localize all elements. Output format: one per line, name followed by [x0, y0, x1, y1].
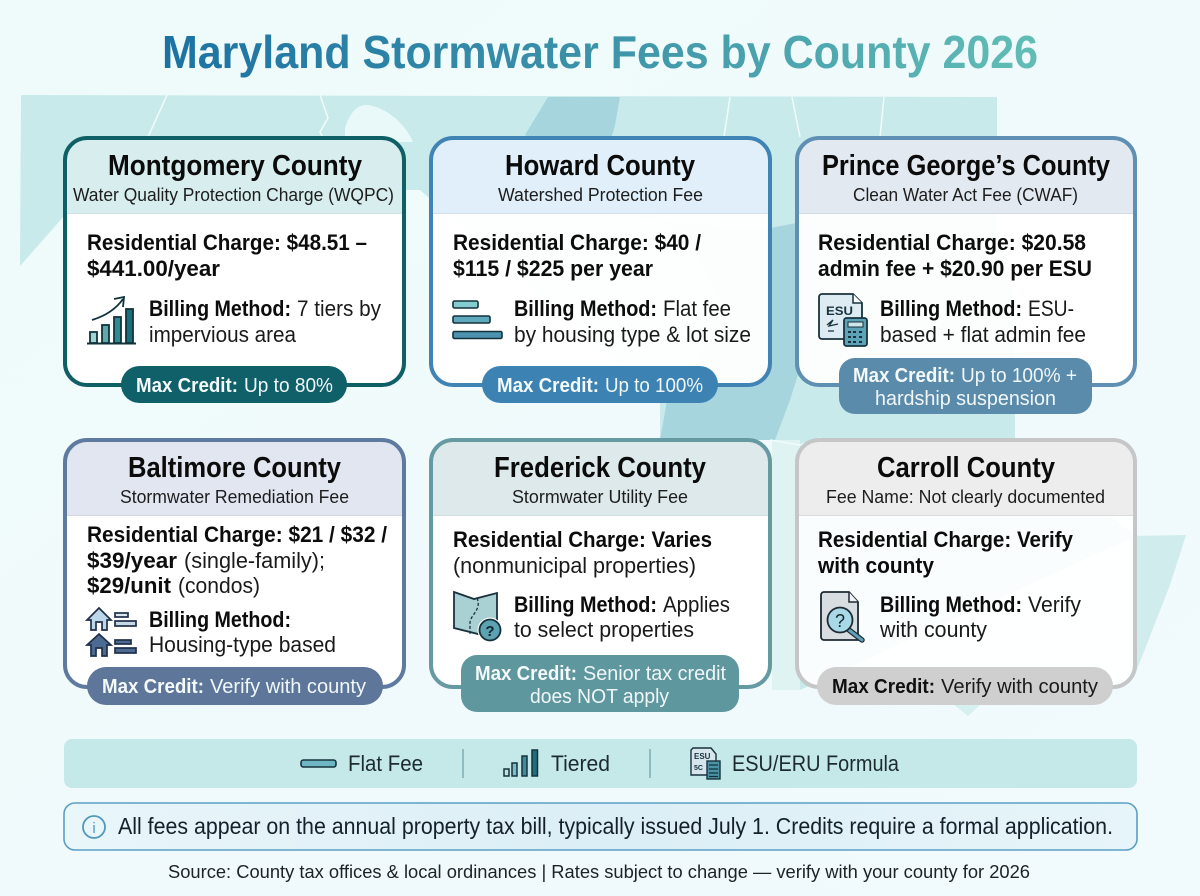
residential charge [87, 522, 387, 598]
max credit badge: Verify with county [210, 675, 367, 698]
residential charge: $39/year [87, 548, 177, 573]
billing method: Billing Method: [514, 592, 657, 617]
residential charge [453, 527, 712, 578]
billing method: Billing Method: [880, 592, 1022, 617]
icon: map with question mark [454, 592, 502, 642]
residential charge: (nonmunicipal properties) [453, 553, 696, 578]
billing method: to select properties [514, 617, 694, 642]
max credit badge: Max Credit: [853, 364, 955, 387]
billing method: Applies [663, 592, 730, 617]
icon: flat fee [301, 760, 336, 767]
max credit badge [87, 667, 383, 705]
max credit badge: Max Credit: [832, 675, 935, 698]
icon: flat fee bars [453, 301, 502, 338]
max credit badge: Up to 100% + [961, 364, 1077, 387]
billing method [149, 607, 336, 657]
max credit badge: Max Credit: [136, 374, 238, 397]
heading: Prince George's County: Prince George’s County [822, 150, 1110, 182]
max credit badge: Up to 80% [244, 374, 333, 397]
residential charge: Residential Charge: $20.58 [818, 230, 1086, 255]
max credit badge: Max Credit: [102, 675, 204, 698]
heading: Carroll County: Carroll County [877, 452, 1055, 484]
max credit badge [461, 655, 739, 712]
icon: info: i [92, 820, 96, 837]
legend [64, 739, 1137, 788]
residential charge: Residential Charge: $48.51 – [87, 230, 367, 255]
icon: document with magnifier [821, 592, 862, 640]
heading: Montgomery County: Montgomery County [108, 150, 362, 182]
fee name: Clean Water Act Fee (CWAF) [853, 184, 1078, 205]
residential charge: admin fee + $20.90 per ESU [818, 256, 1092, 281]
residential charge [817, 527, 1074, 578]
billing method [880, 296, 1086, 347]
max credit badge: does NOT apply [530, 685, 670, 708]
label: flat fee: Flat Fee [348, 751, 423, 776]
billing method: Flat fee [663, 296, 731, 321]
max credit badge [839, 358, 1092, 414]
max credit badge: Max Credit: [475, 662, 577, 685]
icon: document with magnifier: ? [835, 611, 845, 631]
fee name: Watershed Protection Fee [498, 184, 703, 205]
icon: ESU document and calculator [819, 294, 867, 346]
billing method: Billing Method: [149, 607, 291, 632]
residential charge: $115 / $225 per year [453, 256, 653, 281]
residential charge: $29/unit [87, 573, 172, 598]
icon: houses and bars [87, 608, 136, 656]
residential charge: Residential Charge: Varies [453, 527, 712, 552]
fee name: Stormwater Remediation Fee [120, 486, 349, 507]
panel: Howard County [431, 138, 770, 403]
icon: info [83, 816, 105, 838]
billing method: 7 tiers by [297, 296, 381, 321]
max credit badge: Verify with county [941, 675, 1099, 698]
icon: tiered [504, 750, 538, 776]
billing method: impervious area [149, 322, 297, 347]
panel: Montgomery County [65, 138, 404, 403]
billing method [879, 592, 1081, 642]
label: tiered: Tiered [551, 751, 610, 776]
billing method [514, 296, 751, 347]
panel: Frederick County [431, 440, 770, 712]
billing method: by housing type & lot size [514, 322, 751, 347]
max credit badge: Up to 100% [605, 374, 703, 397]
residential charge: Residential Charge: Verify [818, 527, 1074, 552]
residential charge: (single-family); [184, 548, 325, 573]
fee name: Stormwater Utility Fee [512, 486, 688, 507]
billing method: Billing Method: [149, 296, 291, 321]
title: Maryland Stormwater Fees by County 2026 [162, 26, 1038, 78]
residential charge: with county [817, 553, 935, 578]
billing method: with county [879, 617, 987, 642]
residential charge [87, 230, 367, 281]
residential charge: Residential Charge: $40 / [453, 230, 701, 255]
residential charge [453, 230, 701, 281]
residential charge [818, 230, 1092, 281]
heading: Frederick County: Frederick County [494, 452, 706, 484]
max credit badge: hardship suspension [875, 387, 1056, 410]
heading: Howard County: Howard County [505, 150, 695, 182]
icon: ESU formula: ESU [694, 752, 711, 761]
icon: ESU document and calculator: ESU [826, 304, 853, 318]
note text: All fees appear on the annual property tax bill, typically issued July 1. Credits require a formal application. [118, 813, 1113, 839]
icon: rising bar chart [87, 297, 136, 344]
label: ESU/ERU formula: ESU/ERU Formula [732, 751, 900, 776]
billing method: Housing-type based [149, 632, 336, 657]
source line: Source: County tax offices & local ordinances | Rates subject to change — verify with your county for 2026 [168, 862, 1030, 882]
billing method: Verify [1028, 592, 1081, 617]
billing method [514, 592, 730, 642]
residential charge: $441.00/year [87, 256, 220, 281]
billing method: ESU- [1028, 296, 1074, 321]
icon: map with question mark: ? [485, 623, 495, 640]
panel: Prince George's County [797, 138, 1135, 414]
fee name: Fee Name: Not clearly documented [826, 486, 1105, 507]
max credit badge: Senior tax credit [583, 662, 726, 685]
max credit badge [482, 366, 718, 403]
residential charge: (condos) [178, 573, 260, 598]
icon: ESU formula [691, 748, 720, 779]
max credit badge [817, 667, 1113, 705]
fee name: Water Quality Protection Charge (WQPC) [73, 184, 394, 205]
info note [64, 803, 1137, 850]
billing method: Billing Method: [514, 296, 657, 321]
billing method: Billing Method: [880, 296, 1022, 321]
heading: Baltimore County: Baltimore County [128, 452, 341, 484]
max credit badge [121, 366, 347, 403]
max credit badge: Max Credit: [497, 374, 599, 397]
background map of Maryland [20, 95, 1186, 716]
billing method: based + flat admin fee [880, 322, 1086, 347]
residential charge: Residential Charge: $21 / $32 / [87, 522, 387, 547]
panel: Baltimore County [65, 440, 404, 705]
panel: Carroll County [797, 440, 1135, 705]
icon: ESU formula: 5C [694, 765, 703, 772]
billing method [149, 296, 381, 347]
